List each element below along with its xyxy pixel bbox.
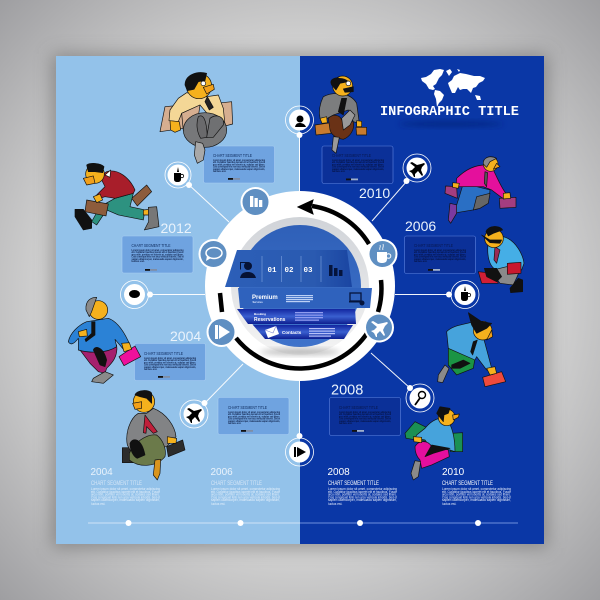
- text box 2: sapien ullamcorper, malesuada sapien dignissim,: [132, 257, 184, 261]
- bottom column 2004: sapien ullamcorper, malesuada sapien dignissim,: [91, 498, 160, 502]
- bottom column 2004: arcu nibh, porttitor vel lobortis at, sodales sed libero.: [91, 493, 160, 497]
- text box 2: Lorem ipsum dolor sit amet, consectetur adipiscing: [132, 248, 184, 252]
- text box 1: sapien ullamcorper, malesuada sapien dignissim,: [213, 167, 265, 171]
- text box 6: Lorem ipsum dolor sit amet, consectetur adipiscing: [414, 248, 466, 252]
- bottom column 2006: arcu nibh, porttitor vel lobortis at, sodales sed libero.: [211, 493, 280, 497]
- year labels: 2004: [170, 328, 201, 344]
- title: INFOGRAPHIC TITLE: [380, 105, 519, 120]
- bottom column 2008: sapien ullamcorper, malesuada sapien dignissim,: [328, 498, 397, 502]
- figure: man with green bags: [405, 407, 463, 480]
- text box 4: luctus est.: [228, 421, 242, 425]
- grey inner ring: [231, 217, 369, 355]
- bottom column 2006: Lorem ipsum dolor sit amet, consectetur adipiscing: [211, 487, 280, 491]
- text box 6: CHART SEGMENT TITLE: [414, 243, 453, 248]
- ribbon: premium: Services: [252, 301, 263, 304]
- ring icon: speech: [198, 239, 228, 269]
- bottom column 2008: arcu nibh, porttitor vel lobortis at, sodales sed libero.: [328, 493, 397, 497]
- ring icon: coffee: [368, 239, 398, 269]
- figure: man in light blue shirt: [478, 226, 524, 293]
- text box 6: sapien ullamcorper, malesuada sapien dignissim,: [414, 257, 466, 261]
- bottom column 2008: 2008: [328, 467, 350, 478]
- text box 5: sapien ullamcorper, malesuada sapien dignissim,: [332, 167, 384, 171]
- bottom column 2004: [90, 467, 160, 506]
- text box 3: Cras consequat felis non arcu vehicula lobortis. Sed et: [144, 363, 196, 367]
- bottom column 2006: [210, 467, 280, 506]
- bottom column 2010: luctus est.: [442, 502, 456, 506]
- text box 4: [218, 398, 289, 434]
- text box 2: CHART SEGMENT TITLE: [132, 243, 170, 248]
- figure: man in blue suit with green trousers: [438, 313, 506, 387]
- bottom column 2008: Lorem ipsum dolor sit amet, consectetur adipiscing: [328, 487, 397, 491]
- text box 3: luctus est.: [144, 367, 158, 371]
- figure: man in red sweater: [75, 163, 159, 230]
- year labels: 2010: [359, 185, 390, 201]
- bottom column 2010: Cras consequat felis non arcu vehicula lobortis. Sed et: [442, 495, 511, 499]
- text box 5: Lorem ipsum dolor sit amet, consectetur adipiscing: [332, 158, 384, 162]
- satellite icon: plane: [180, 400, 208, 428]
- text box 6: luctus est.: [414, 259, 428, 263]
- text box 3: [134, 344, 206, 380]
- year labels: 2012: [160, 220, 192, 236]
- bottom column 2006: luctus est.: [211, 502, 225, 506]
- white ring: [205, 191, 395, 381]
- text box 7: Cras consequat felis non arcu vehicula lobortis. Sed et: [339, 417, 391, 421]
- icon: bars: [329, 265, 342, 276]
- satellite icon: coffee: [446, 280, 479, 308]
- text box 4: CHART SEGMENT TITLE: [228, 405, 267, 410]
- text box 1: arcu nibh, porttitor vel lobortis at, sodales sed libero.: [213, 162, 265, 166]
- text box 2: luctus est.: [132, 259, 145, 263]
- text box 1: Cras consequat felis non arcu vehicula lobortis. Sed et: [213, 165, 265, 169]
- text box 7: Lorem ipsum dolor sit amet, consectetur adipiscing: [339, 410, 391, 414]
- text box 7: [330, 398, 400, 436]
- ribbon: contacts: [253, 325, 353, 339]
- number 03: 03: [304, 267, 313, 275]
- text box 5: arcu nibh, porttitor vel lobortis at, sodales sed libero.: [332, 162, 384, 166]
- bottom column 2006: Cras consequat felis non arcu vehicula lobortis. Sed et: [211, 495, 280, 499]
- bottom column 2008: CHART SEGMENT TITLE: [328, 481, 379, 487]
- connector lines: [150, 134, 450, 437]
- text box 3: arcu nibh, porttitor vel lobortis at, sodales sed libero.: [144, 360, 196, 364]
- ribbon: stats: [225, 250, 352, 287]
- central wheel: [198, 187, 398, 381]
- text box 4: Lorem ipsum dolor sit amet, consectetur adipiscing: [228, 410, 280, 414]
- bottom column 2010: 2010: [442, 467, 465, 478]
- ribbon: reservations: Booking: [254, 312, 266, 316]
- icon: envelope: [265, 326, 279, 338]
- text box 4: arcu nibh, porttitor vel lobortis at, sodales sed libero.: [228, 414, 280, 418]
- text box 1: Lorem ipsum dolor sit amet, consectetur adipiscing: [213, 158, 265, 162]
- text box 6: arcu nibh, porttitor vel lobortis at, sodales sed libero.: [414, 252, 466, 256]
- bottom column 2010: elit. Curabitur faucibus laoreet elit et faucibus. Fusce: [442, 490, 511, 494]
- satellite icon: cloud person: [286, 106, 314, 138]
- number 01: 01: [268, 267, 277, 275]
- ring icon: bars: [240, 187, 270, 217]
- panel: left light blue: [56, 56, 300, 544]
- text box 5: elit. Curabitur faucibus laoreet elit et faucibus. Fusce: [332, 160, 384, 164]
- satellite icon: coffee: [165, 162, 192, 188]
- timeline: [88, 520, 518, 526]
- text box 2: [122, 236, 193, 273]
- bottom column 2010: CHART SEGMENT TITLE: [442, 481, 493, 487]
- figure: man in pink shirt: [445, 157, 516, 223]
- bottom column 2006: sapien ullamcorper, malesuada sapien dignissim,: [211, 498, 280, 502]
- icon: laptop: [349, 293, 364, 306]
- text box 4: Cras consequat felis non arcu vehicula lobortis. Sed et: [228, 417, 280, 421]
- figure: man in grey shirt with red tie: [122, 391, 185, 480]
- bottom column 2008: [328, 467, 397, 506]
- text box 7: sapien ullamcorper, malesuada sapien dignissim,: [339, 419, 391, 423]
- bottom column 2004: 2004: [90, 467, 113, 478]
- bottom column 2008: Cras consequat felis non arcu vehicula lobortis. Sed et: [328, 495, 397, 499]
- title shadow: [399, 121, 503, 127]
- bottom column 2004: elit. Curabitur faucibus laoreet elit et faucibus. Fusce: [91, 490, 160, 494]
- bottom column 2006: elit. Curabitur faucibus laoreet elit et faucibus. Fusce: [211, 490, 280, 494]
- text box 5: Cras consequat felis non arcu vehicula lobortis. Sed et: [332, 165, 384, 169]
- text box 7: elit. Curabitur faucibus laoreet elit et faucibus. Fusce: [339, 412, 391, 416]
- blue disc: [239, 225, 361, 347]
- text box 4: sapien ullamcorper, malesuada sapien dignissim,: [228, 419, 280, 423]
- bottom column 2004: luctus est.: [91, 502, 105, 506]
- bottom column 2008: luctus est.: [328, 502, 342, 506]
- ribbon: contacts: Contacts: [282, 330, 302, 335]
- icon: world map: [421, 69, 485, 107]
- text box 1: elit. Curabitur faucibus laoreet elit et faucibus. Fusce: [213, 160, 265, 164]
- text box 1: luctus est.: [213, 169, 227, 173]
- arrowhead: [298, 200, 313, 214]
- text box 3: Lorem ipsum dolor sit amet, consectetur adipiscing: [144, 356, 196, 360]
- year labels: [160, 185, 436, 398]
- text box 3: elit. Curabitur faucibus laoreet elit et faucibus. Fusce: [144, 358, 196, 362]
- black progress arrow: [220, 206, 381, 368]
- text box 5: CHART SEGMENT TITLE: [332, 153, 371, 158]
- figure: man in grey shirt: [315, 76, 367, 153]
- text box 3: CHART SEGMENT TITLE: [144, 351, 183, 356]
- text box 5: [322, 146, 393, 184]
- bottom column 2008: elit. Curabitur faucibus laoreet elit et faucibus. Fusce: [328, 490, 397, 494]
- satellite icon: speech: [120, 280, 153, 308]
- satellite icon: magnifier: [406, 384, 434, 412]
- text box 7: arcu nibh, porttitor vel lobortis at, sodales sed libero.: [339, 414, 391, 418]
- text box 6: [404, 236, 476, 274]
- satellite icon: play: [286, 433, 314, 466]
- text box 7: CHART SEGMENT TITLE: [339, 405, 378, 410]
- bottom column 2010: [442, 467, 511, 506]
- bottom column 2004: Cras consequat felis non arcu vehicula lobortis. Sed et: [91, 495, 160, 499]
- satellite icon: plane: [403, 154, 431, 184]
- ribbon: premium: Premium: [252, 295, 278, 301]
- disc bottom shadow: [260, 349, 340, 355]
- number 02: 02: [284, 267, 294, 275]
- text box 2: Cras consequat felis non arcu vehicula lobortis. Sed et: [132, 255, 184, 259]
- title block: [380, 69, 519, 127]
- bottom column 2010: sapien ullamcorper, malesuada sapien dignissim,: [442, 498, 511, 502]
- ribbon: reservations: Reservations: [254, 317, 286, 323]
- text box 1: [204, 146, 274, 183]
- text box 3: sapien ullamcorper, malesuada sapien dignissim,: [144, 365, 196, 369]
- figure: man in tan shirt: [160, 73, 233, 163]
- text box 6: elit. Curabitur faucibus laoreet elit et faucibus. Fusce: [414, 250, 466, 254]
- bottom column 2010: arcu nibh, porttitor vel lobortis at, sodales sed libero.: [442, 493, 511, 497]
- panel: right dark blue: [300, 56, 544, 544]
- ring icon: play: [206, 317, 236, 347]
- text box 5: luctus est.: [332, 169, 346, 173]
- bottom column 2006: 2006: [210, 467, 233, 478]
- bottom column 2006: CHART SEGMENT TITLE: [211, 481, 262, 487]
- bottom column 2004: CHART SEGMENT TITLE: [91, 481, 142, 487]
- text box 1: CHART SEGMENT TITLE: [213, 153, 252, 158]
- text box 6: Cras consequat felis non arcu vehicula lobortis. Sed et: [414, 255, 466, 259]
- panel shadow: [52, 54, 548, 548]
- icon: person speech: [240, 262, 256, 278]
- bottom column 2004: Lorem ipsum dolor sit amet, consectetur adipiscing: [91, 487, 160, 491]
- year labels: 2006: [405, 218, 436, 234]
- text box 7: luctus est.: [339, 421, 353, 425]
- text box 2: arcu nibh, porttitor vel lobortis at, sodales sed libero.: [132, 252, 184, 256]
- ribbon: premium: [238, 288, 372, 308]
- ribbon: reservations: [237, 309, 356, 324]
- bottom column 2010: Lorem ipsum dolor sit amet, consectetur adipiscing: [442, 487, 511, 491]
- figure: man in blue sweater: [68, 297, 141, 383]
- ring icon: plane: [364, 312, 394, 342]
- text box 4: elit. Curabitur faucibus laoreet elit et faucibus. Fusce: [228, 412, 280, 416]
- year labels: 2008: [331, 382, 363, 398]
- text box 2: elit. Curabitur faucibus laoreet elit et faucibus. Fusce: [132, 250, 184, 254]
